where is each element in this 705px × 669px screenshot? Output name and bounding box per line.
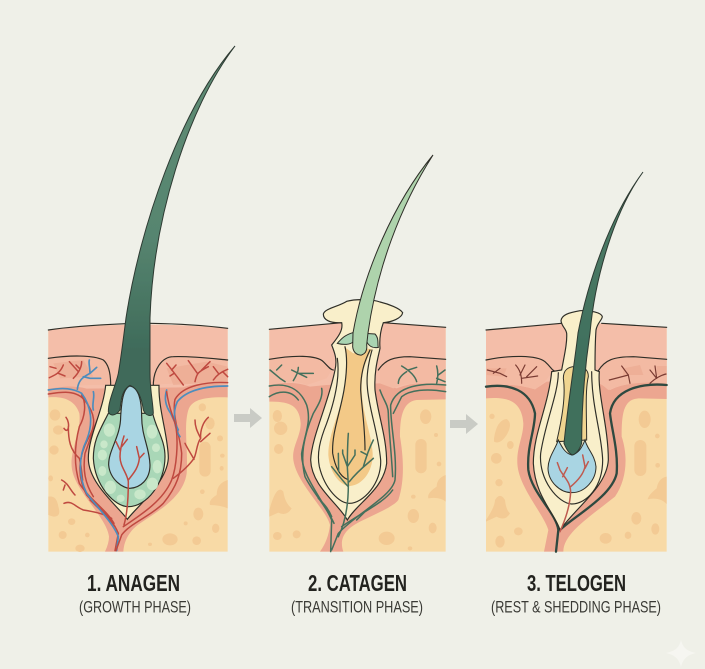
pocket vessels	[270, 365, 445, 383]
hair shaft: anagen	[108, 46, 235, 416]
blood vessels: left	[48, 392, 118, 551]
anagen title: 1. ANAGEN	[87, 570, 180, 596]
icon: sparkle watermark	[666, 640, 696, 667]
follicle outer sheath	[533, 311, 608, 530]
skin pockets	[269, 356, 332, 385]
catagen title: 2. CATAGEN	[308, 570, 407, 596]
dermis base	[486, 323, 667, 552]
hair shaft: telogen	[564, 172, 643, 455]
skin pockets	[486, 356, 553, 389]
heading: anagen	[79, 570, 191, 616]
vessels: dark thick	[486, 386, 558, 552]
anagen subtitle: (GROWTH PHASE)	[79, 598, 191, 616]
fat blobs	[48, 403, 228, 552]
dermal papilla	[109, 386, 150, 488]
arrow 1	[234, 408, 262, 428]
vessels right	[332, 384, 446, 550]
sebaceous collar	[337, 333, 378, 348]
outer root sheath band	[48, 377, 228, 552]
papilla capillaries	[116, 436, 144, 525]
bulb capillaries	[557, 455, 588, 532]
dermis base	[48, 325, 228, 552]
hair shaft: catagen	[353, 155, 433, 355]
heading: telogen	[491, 570, 661, 616]
panel: catagen follicle	[269, 155, 446, 552]
arrow 2	[450, 414, 478, 434]
outer root sheath band	[486, 373, 667, 552]
capillary tree	[332, 433, 373, 537]
epidermis	[48, 325, 228, 389]
follicle outer sheath	[311, 300, 403, 520]
epidermis	[486, 323, 667, 390]
heading: catagen	[291, 570, 423, 616]
germinal matrix bulb	[93, 413, 165, 507]
matrix cells	[98, 423, 162, 502]
blood vessels: right	[116, 383, 228, 551]
panel: anagen follicle	[48, 46, 235, 552]
fat blobs	[486, 411, 667, 548]
fat blobs	[269, 409, 446, 550]
follicle outer sheath	[88, 385, 168, 519]
pocket vessels	[487, 365, 666, 383]
orange inner sheath	[328, 347, 373, 486]
epidermis	[269, 323, 446, 388]
vessels left	[269, 385, 332, 552]
yellow inner sheath	[557, 367, 588, 442]
telogen title: 3. TELOGEN	[527, 570, 626, 596]
dermis base	[269, 323, 446, 552]
skin pockets	[48, 356, 111, 389]
catagen subtitle: (TRANSITION PHASE)	[291, 598, 423, 616]
pocket blood vessels	[49, 361, 228, 385]
inner root sheath outline	[318, 350, 381, 503]
inner sheath line	[333, 347, 370, 479]
outer root sheath band	[269, 370, 446, 552]
club bulb	[548, 440, 596, 493]
inner sheath lines	[540, 372, 603, 504]
panel: telogen follicle	[486, 172, 667, 552]
